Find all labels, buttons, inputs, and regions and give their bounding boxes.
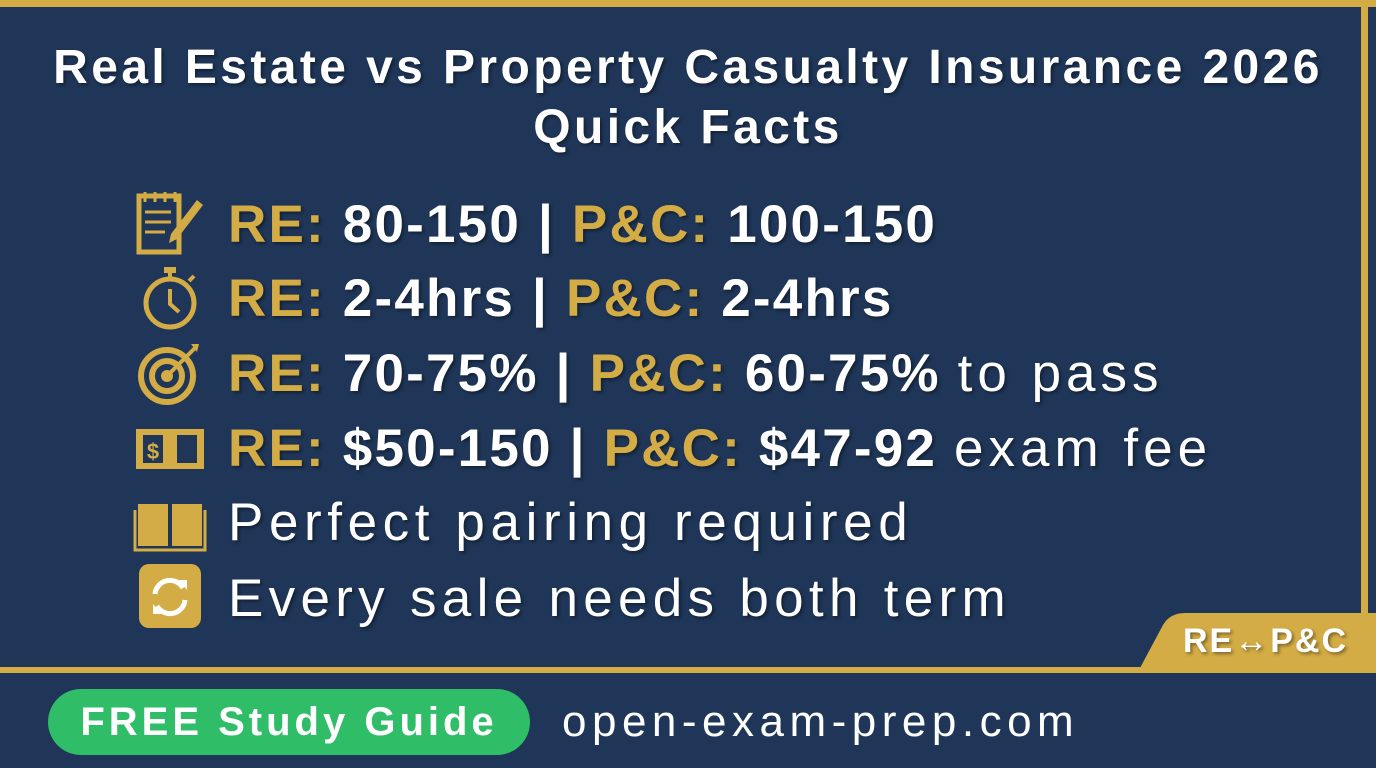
row 6: Every sale needs both term <box>228 569 1011 628</box>
icon: money <box>136 429 204 469</box>
row 2: RE: 2-4hrs | P&C: 2-4hrs <box>228 269 894 328</box>
footer button: FREE Study Guide <box>80 700 498 744</box>
icon: target <box>138 344 199 405</box>
icon: notepad <box>136 192 203 254</box>
row 3: RE: 70-75% | P&C: 60-75% to pass <box>228 344 1164 403</box>
row 5: Perfect pairing required <box>228 493 913 552</box>
icon: book <box>134 504 206 552</box>
footer url: open-exam-prep.com <box>562 697 1079 746</box>
title <box>53 41 1323 156</box>
title: Real Estate vs Property Casualty Insurance 2026 <box>53 41 1323 94</box>
icon: stopwatch <box>144 267 196 330</box>
row 1: RE: 80-150 | P&C: 100-150 <box>228 195 937 254</box>
row 4: RE: $50-150 | P&C: $47-92 exam fee <box>228 419 1212 478</box>
title: Quick Facts <box>533 101 843 154</box>
icon: money: $ <box>147 439 159 464</box>
tab label: RE↔P&C <box>1183 622 1348 660</box>
footer button <box>48 689 530 755</box>
icon: refresh <box>139 564 201 628</box>
